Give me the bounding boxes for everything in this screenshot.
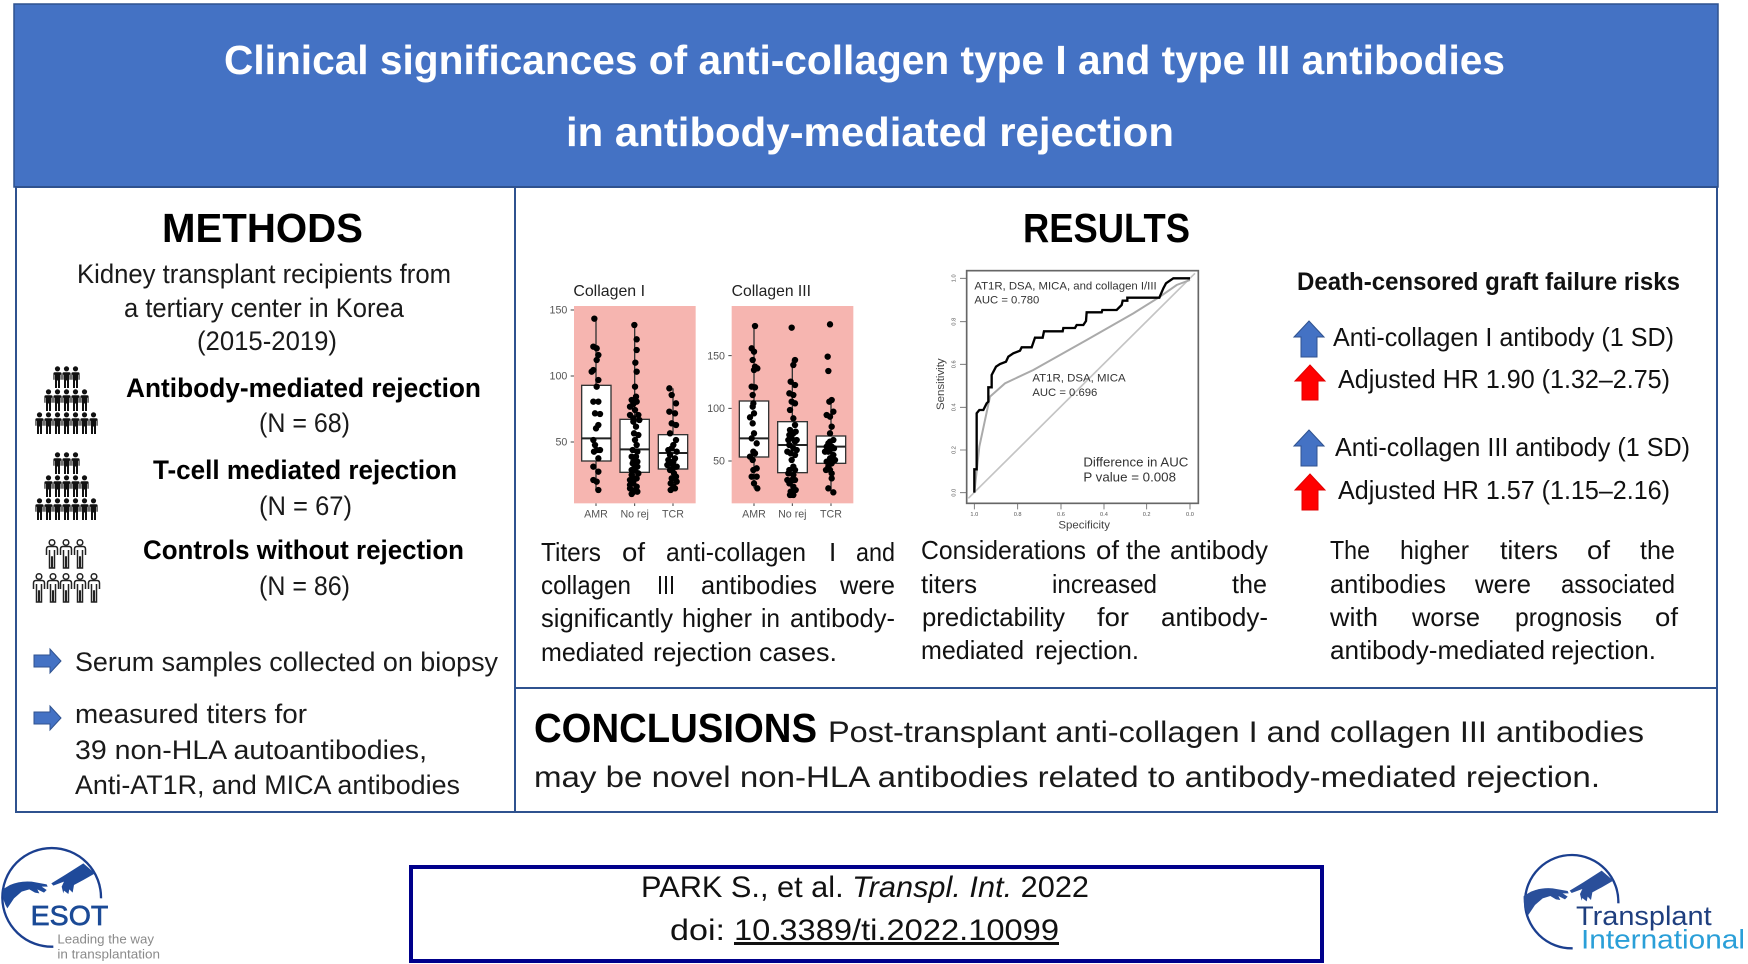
text: prognosis finding: antibodies <box>1330 569 1446 599</box>
text: predictability finding: predictability <box>922 602 1065 632</box>
text: predictability finding: rejection. <box>1035 635 1139 665</box>
icon: blue up arrow <box>1294 321 1324 357</box>
text: predictability finding <box>921 535 1268 665</box>
panel: methods <box>16 187 515 812</box>
icon: red up arrow <box>1295 365 1325 400</box>
header banner <box>14 4 1718 187</box>
text: collagen titers finding: anti-collagen <box>666 537 806 567</box>
chart: ROC curve: 0.2 <box>1143 512 1151 518</box>
group: antibody-mediated rejection: (N = 68) <box>259 408 350 438</box>
text: measured titers <box>75 699 460 800</box>
text: study population: (2015-2019) <box>197 326 337 356</box>
text: predictability finding: the <box>1232 569 1267 599</box>
text: prognosis finding: of <box>1655 602 1679 632</box>
chart: collagen box plots <box>550 283 853 521</box>
text: collagen titers finding: of <box>622 537 646 567</box>
chart: ROC curve: 0.6 <box>951 360 957 368</box>
text: collagen titers finding: III <box>657 570 675 600</box>
heading: graft failure risks: Death-censored graft failure risks <box>1297 268 1680 296</box>
chart: collagen box plots: 150 <box>707 350 725 362</box>
chart: collagen box plots: AMR <box>742 509 766 521</box>
text: collagen titers finding: antibody- <box>790 603 895 633</box>
text: prognosis finding: were <box>1474 569 1531 599</box>
icon: red up arrow <box>1295 474 1325 510</box>
text: study population: Kidney transplant recipients from <box>77 259 451 289</box>
text: serum samples: Serum samples collected on biopsy <box>75 647 498 677</box>
group: T-cell mediated rejection: T-cell mediated rejection <box>153 455 457 485</box>
chart: ROC curve: 0.0 <box>951 489 957 497</box>
icon: antibody-mediated rejection patients <box>35 366 98 434</box>
chart: ROC curve: 0.2 <box>951 446 957 454</box>
text: measured titers: Anti-AT1R, and MICA antibodies <box>75 770 460 800</box>
chart: collagen box plots: No rej <box>778 509 807 521</box>
text: collagen titers finding: cases. <box>759 637 837 667</box>
icon: blue up arrow <box>1294 430 1324 466</box>
chart: collagen box plots: No rej <box>620 509 649 521</box>
chart: ROC curve: 0.8 <box>951 318 957 326</box>
chart: ROC curve: AUC = 0.780 <box>974 294 1039 306</box>
chart: collagen box plots: Collagen III <box>732 283 811 300</box>
text: measured titers: measured titers for <box>75 699 307 729</box>
logo: ESOT: in transplantation <box>57 946 160 961</box>
chart: ROC curve: 1.0 <box>951 274 957 282</box>
chart: collagen box plots: Collagen I <box>573 283 645 300</box>
logo: Transplant International <box>1524 855 1745 954</box>
group: antibody-mediated rejection <box>126 373 481 438</box>
text: anti-collagen I: Anti-collagen I antibody (1 SD) <box>1333 322 1674 352</box>
text: study population: a tertiary center in Korea <box>124 293 405 323</box>
chart: collagen box plots: 50 <box>713 456 725 468</box>
text: collagen titers finding: were <box>839 570 895 600</box>
title: in antibody-mediated rejection <box>566 109 1174 155</box>
chart: ROC curve: 0.8 <box>1014 512 1022 518</box>
section: graft failure risks <box>1294 268 1690 510</box>
text: prognosis finding: rejection. <box>1551 635 1656 665</box>
icon: T-cell mediated rejection patients <box>35 452 98 520</box>
arrow: measured titers <box>34 706 61 730</box>
chart: ROC curve: 0.4 <box>1100 512 1108 518</box>
text: prognosis finding: antibody-mediated <box>1330 635 1545 665</box>
chart: ROC curve: AUC = 0.696 <box>1032 387 1097 399</box>
chart: ROC curve: Specificity <box>1058 519 1110 531</box>
text: prognosis finding: prognosis <box>1515 602 1622 632</box>
text: predictability finding: antibody <box>1170 535 1268 565</box>
chart: ROC curve: P value = 0.008 <box>1083 470 1176 485</box>
chart: collagen box plots: 100 <box>550 371 567 383</box>
heading: results: RESULTS <box>1023 205 1190 251</box>
text: prognosis finding: the <box>1640 535 1675 565</box>
text: measured titers: 39 non-HLA autoantibodies, <box>75 735 427 765</box>
chart: collagen box plots: 50 <box>555 437 567 449</box>
text: doi: doi: <box>670 914 725 947</box>
chart: ROC curve: 0.0 <box>1186 512 1194 518</box>
group: controls without rejection: (N = 86) <box>259 571 350 601</box>
text: collagen titers finding: antibodies <box>701 570 817 600</box>
text: collagen titers finding: significantly <box>541 603 673 633</box>
text: adjusted HR collagen I: Adjusted HR 1.90 (1.32–2.75) <box>1338 364 1670 394</box>
text: study population <box>77 259 451 356</box>
text: predictability finding: antibody- <box>1161 602 1268 632</box>
chart: ROC curve: AT1R, DSA, MICA, and collagen I/III <box>974 280 1157 292</box>
chart: ROC curve: 1.0 <box>970 512 978 518</box>
logo: ESOT: Leading the way <box>57 931 154 946</box>
text: prognosis finding <box>1329 535 1679 665</box>
text: predictability finding: Considerations <box>921 535 1086 565</box>
chart: ROC curve: 0.6 <box>1057 512 1065 518</box>
text: collagen titers finding <box>541 537 895 667</box>
chart: collagen box plots: TCR <box>662 509 684 521</box>
text: predictability finding: mediated <box>921 635 1024 665</box>
chart: collagen box plots: AMR <box>584 509 608 521</box>
chart: ROC curve: Sensitivity <box>935 358 947 410</box>
text: prognosis finding: with <box>1329 602 1378 632</box>
chart: collagen box plots: TCR <box>820 509 842 521</box>
group: controls without rejection <box>143 535 464 601</box>
text: citation: PARK S., et al. Transpl. Int. 2022 <box>641 871 1089 904</box>
text: collagen titers finding: and <box>856 537 895 567</box>
group: controls without rejection: Controls without rejection <box>143 535 464 565</box>
text: predictability finding: the <box>1126 535 1161 565</box>
text: predictability finding: titers <box>921 569 977 599</box>
text: prognosis finding: of <box>1587 535 1611 565</box>
panel: results <box>515 187 1717 688</box>
logo: ESOT: ESOT <box>31 900 108 931</box>
text: conclusions body: Post-transplant anti-collagen I and collagen III antibodies <box>828 716 1644 749</box>
text: conclusions body <box>534 716 1644 794</box>
chart: ROC curve: Difference in AUC <box>1083 455 1188 470</box>
text: prognosis finding: associated <box>1561 569 1675 599</box>
text: prognosis finding: worse <box>1411 602 1480 632</box>
group: T-cell mediated rejection: (N = 67) <box>259 491 352 521</box>
title: Clinical significances of anti-collagen type I and type III antibodies <box>224 37 1505 83</box>
icon: controls without rejection <box>34 540 100 602</box>
text: predictability finding: increased <box>1052 569 1157 599</box>
title <box>224 37 1505 155</box>
chart: ROC curve: AT1R, DSA, MICA <box>1032 373 1126 385</box>
group: antibody-mediated rejection: Antibody-mediated rejection <box>126 373 481 403</box>
text: conclusions body: may be novel non-HLA antibodies related to antibody-mediated rejection. <box>534 761 1600 794</box>
citation box <box>411 867 1322 961</box>
text: collagen titers finding: collagen <box>541 570 631 600</box>
text: collagen titers finding: I <box>829 537 836 567</box>
panel: conclusions <box>515 688 1717 812</box>
text: collagen titers finding: in <box>761 603 780 633</box>
arrow: serum samples <box>34 649 61 673</box>
text: predictability finding: of <box>1096 535 1120 565</box>
text: adjusted HR collagen III: Adjusted HR 1.57 (1.15–2.16) <box>1338 475 1670 505</box>
text: predictability finding: for <box>1097 602 1129 632</box>
heading: methods: METHODS <box>162 205 363 251</box>
text: prognosis finding: The <box>1330 535 1370 565</box>
chart: collagen box plots: 100 <box>707 403 725 415</box>
group: T-cell mediated rejection <box>153 455 457 521</box>
chart: collagen box plots: 150 <box>550 305 567 317</box>
heading: conclusions: CONCLUSIONS <box>534 705 817 751</box>
text: anti-collagen III: Anti-collagen III antibody (1 SD) <box>1335 432 1690 462</box>
chart: ROC curve <box>935 271 1198 531</box>
chart: ROC curve: 0.4 <box>951 403 957 411</box>
logo: Transplant International: Transplant <box>1576 901 1712 931</box>
logo: ESOT <box>2 848 160 961</box>
text: prognosis finding: titers <box>1500 535 1558 565</box>
text: collagen titers finding: mediated <box>541 637 644 667</box>
text: collagen titers finding: rejection <box>653 637 752 667</box>
text: collagen titers finding: higher <box>682 603 752 633</box>
text: doi: 10.3389/ti.2022.10099 <box>734 914 1059 947</box>
text: collagen titers finding: Titers <box>541 537 601 567</box>
text: prognosis finding: higher <box>1400 535 1469 565</box>
logo: Transplant International: International <box>1581 924 1745 954</box>
